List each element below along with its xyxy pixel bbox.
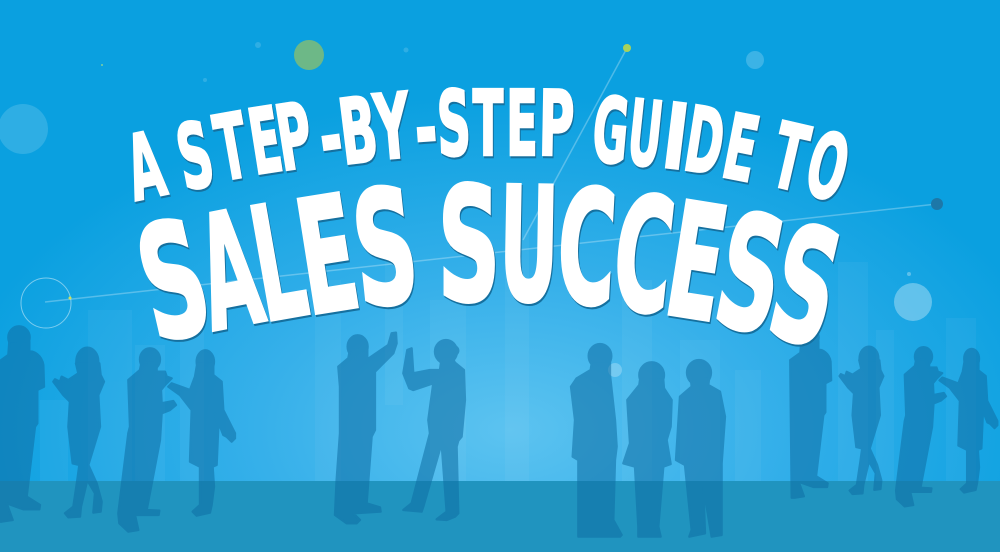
title line 2: S [755,190,856,383]
man gesturing [118,348,176,532]
trend lines [45,48,937,302]
woman high five [403,340,465,520]
title line 1: G [588,77,633,185]
title line 1: - [312,84,349,191]
title line 1: S [435,70,473,177]
silhouettes: right group [790,328,997,507]
title line 2: A [185,177,275,368]
title line 2: E [655,169,737,359]
woman clapping [53,348,104,517]
title line 2: S [122,186,226,379]
title line 1: - [411,76,441,183]
silhouettes: trio [571,344,725,537]
woman in skirt [623,362,672,537]
title line 2: E [285,161,370,352]
title line 1: E [242,87,289,196]
title line 1: P [538,73,575,178]
decorative circles [0,40,943,377]
title line 1: T [763,102,818,212]
title line 1: A [118,112,174,222]
title line 1: P [269,82,319,192]
man from behind [676,360,725,537]
title line 2: S [345,156,426,344]
city skyline [40,230,976,482]
title line 2 [122,154,856,383]
man with hand on chin [0,326,44,522]
title line 1: B [334,78,383,186]
title line 1: I [657,85,694,191]
title line 2: S [438,155,500,338]
title line 2: C [553,156,621,342]
title line 2: U [498,154,560,339]
title line 1: D [678,87,732,196]
floor [0,481,1000,552]
title line 1: S [168,101,222,211]
title [118,70,859,383]
silhouettes: high-five pair [335,333,465,523]
woman talking [168,350,235,516]
silhouettes: left group [0,326,235,532]
title line 2: L [239,170,318,359]
man in suit [571,344,622,537]
title line 1: T [207,93,256,202]
title line 1: T [473,72,504,177]
title line 2: C [605,162,682,351]
title line 1: E [506,71,538,176]
title line 1: U [623,80,667,188]
title line 1: Y [370,75,416,182]
title line 2: S [703,178,798,371]
title line 1: E [715,93,767,203]
title line 1: O [796,111,859,222]
title line 1 [118,70,859,222]
man high five [335,333,397,523]
